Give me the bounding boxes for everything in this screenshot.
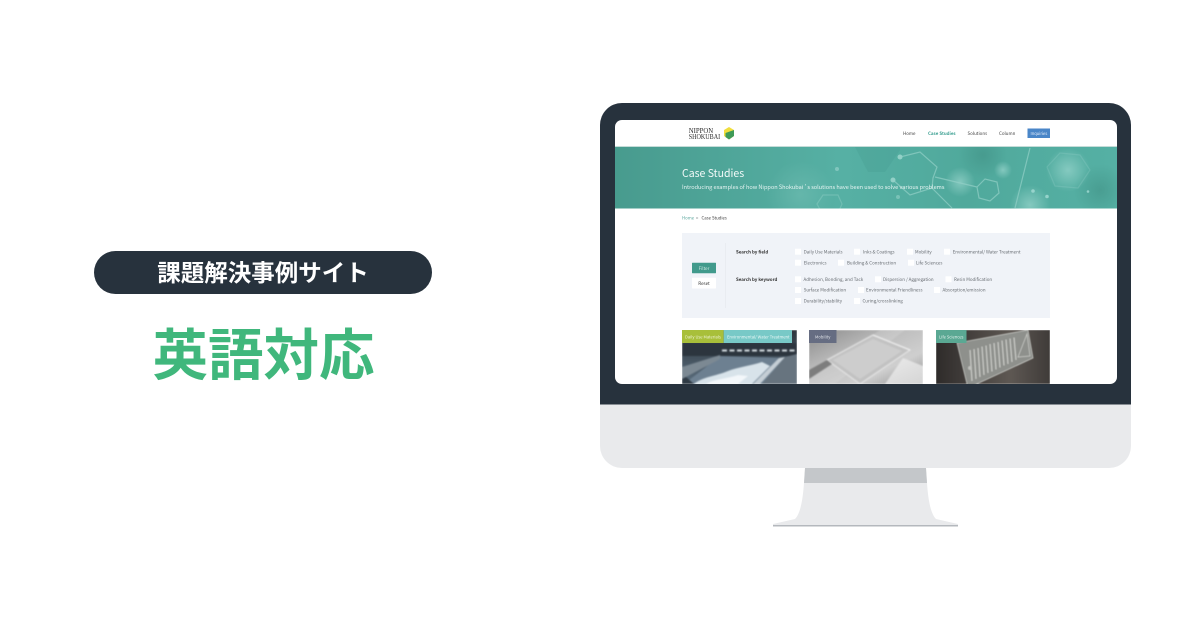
filter button: Filter (699, 265, 710, 272)
navigation: Inquiries (1030, 131, 1047, 137)
logo: NIPPON (689, 126, 714, 135)
search by keyword: Durability/stability (804, 298, 843, 305)
breadcrumb: > (696, 216, 699, 222)
search by keyword: Search by keyword (736, 276, 777, 283)
breadcrumb: Case Studies (702, 214, 727, 222)
search by field: Inks & Coatings (863, 248, 895, 255)
search by keyword: Curing/crosslinking (862, 298, 903, 305)
hero description: Introducing examples of how Nippon Shokubai ' s solutions have been used to solve various problems (682, 183, 945, 191)
icon: monitor stand (773, 468, 958, 526)
logo (688, 127, 734, 140)
filter button (692, 263, 716, 273)
navigation (903, 128, 1050, 138)
hero heading: Case Studies (682, 166, 744, 181)
monitor chin (600, 404, 1131, 468)
search by field: Search by field (736, 248, 768, 255)
search by field (736, 248, 1021, 266)
search by field: Electronics (804, 259, 827, 266)
case card 1: Environmental/ Water Treatment (727, 334, 790, 340)
breadcrumb (682, 216, 727, 220)
case card 1 (682, 330, 797, 384)
monitor frame (600, 103, 1131, 404)
search by keyword: Surface Modification (804, 287, 846, 294)
subtitle pill (94, 251, 432, 294)
search by field: Life Sciences (916, 259, 942, 266)
search by keyword: Absorption/emission (942, 287, 986, 294)
subtitle pill: 課題解決事例サイト (157, 254, 369, 288)
tag: daily use materials (682, 330, 724, 343)
search by keyword (736, 276, 992, 305)
logo: SHOKUBAI (689, 132, 721, 141)
filter panel (682, 233, 1050, 318)
hero banner (615, 146, 1117, 208)
molecule lines (817, 148, 1090, 213)
tag: life sciences (936, 330, 966, 343)
screen: website (615, 120, 1126, 388)
search by field: Daily Use Materials (804, 248, 843, 255)
search by field: Environmental/ Water Treatment (953, 248, 1021, 255)
search by keyword: Adhesion, Bonding, and Tack (804, 276, 864, 283)
case card 1: Daily Use Materials (685, 334, 721, 340)
search by keyword: Dispersion / Aggregation (883, 276, 934, 283)
navigation: Case Studies (928, 130, 956, 137)
tag: mobility (809, 330, 836, 343)
breadcrumb: Home (682, 216, 695, 222)
case card 2: Mobility (815, 334, 831, 340)
search by field: Mobility (915, 248, 932, 255)
navigation: Solutions (968, 130, 987, 137)
case card 3 (936, 330, 1050, 388)
search by keyword: Resin Modification (954, 276, 992, 283)
reset button: Reset (698, 281, 710, 287)
case card 2 (809, 330, 923, 384)
site header (688, 127, 1050, 140)
tag: environmental / water treatment (724, 330, 792, 343)
search by field: Building & Construction (847, 259, 896, 266)
case card 3: Life Sciences (939, 334, 963, 340)
search by keyword: Environmental Friendliness (866, 287, 923, 294)
title: 英語対応 (152, 311, 375, 391)
reset button (692, 278, 716, 288)
navigation: Home (903, 131, 916, 137)
navigation: Column (999, 131, 1016, 137)
